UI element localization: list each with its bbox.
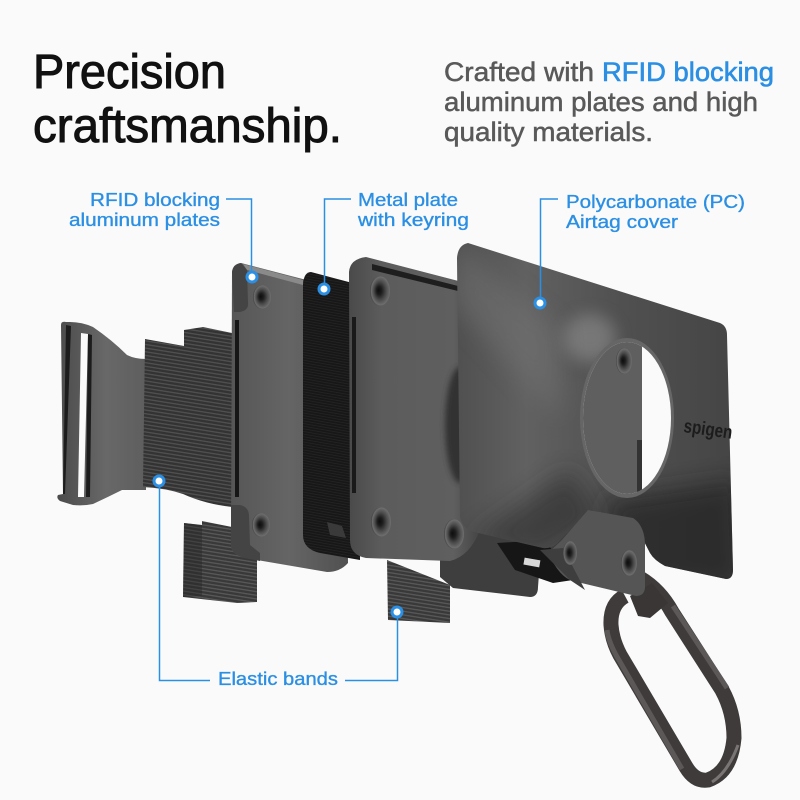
carabiner [607, 578, 738, 782]
callout: RFID blocking aluminum plates: aluminum plates [69, 209, 220, 230]
back elastic band [143, 327, 232, 507]
intro text: quality materials. [444, 117, 653, 147]
lower elastic band [183, 521, 257, 603]
keyring tab [540, 510, 645, 596]
callout: metal plate with keyring: Metal plate [358, 189, 458, 210]
callout: RFID blocking aluminum plates: RFID blocking [90, 189, 220, 210]
intro text [444, 57, 774, 147]
callout: RFID blocking aluminum plates [69, 189, 257, 282]
screw [563, 541, 577, 565]
bottom bracket [440, 500, 600, 597]
callout: polycarbonate Airtag cover: Polycarbonate (PC) [566, 191, 745, 212]
carabiner hinge [630, 583, 668, 618]
screw [252, 513, 270, 537]
logo: spigen [682, 415, 734, 443]
screw [444, 519, 464, 549]
intro text: aluminum plates and high [444, 87, 758, 117]
lower middle elastic band [387, 560, 450, 623]
cover boss shadow [445, 367, 475, 483]
screw [370, 276, 390, 306]
screw [371, 507, 391, 537]
aluminum plate [231, 263, 348, 572]
intro text: Crafted with [444, 57, 594, 87]
buckle [57, 322, 146, 505]
callout: polycarbonate Airtag cover [535, 191, 745, 308]
keyring slot [497, 540, 573, 583]
callout: elastic bands: Elastic bands [218, 668, 338, 689]
title: Precision [33, 46, 226, 99]
product: exploded wallet [57, 240, 745, 782]
cover shading [458, 256, 552, 387]
title [33, 46, 342, 153]
callout: metal plate with keyring: with keyring [357, 209, 469, 230]
callout: elastic bands [154, 476, 402, 689]
title: craftsmanship. [33, 100, 342, 153]
callout: metal plate with keyring [319, 189, 469, 294]
intro text: RFID blocking [602, 57, 774, 87]
circular opening [580, 335, 674, 500]
callout: polycarbonate Airtag cover: Airtag cover [566, 211, 678, 232]
polycarbonate cover [457, 243, 733, 579]
screw [253, 285, 271, 309]
middle plate [349, 257, 480, 561]
screw [616, 348, 632, 374]
screw [621, 550, 637, 576]
metal plate with keyring [303, 272, 360, 560]
